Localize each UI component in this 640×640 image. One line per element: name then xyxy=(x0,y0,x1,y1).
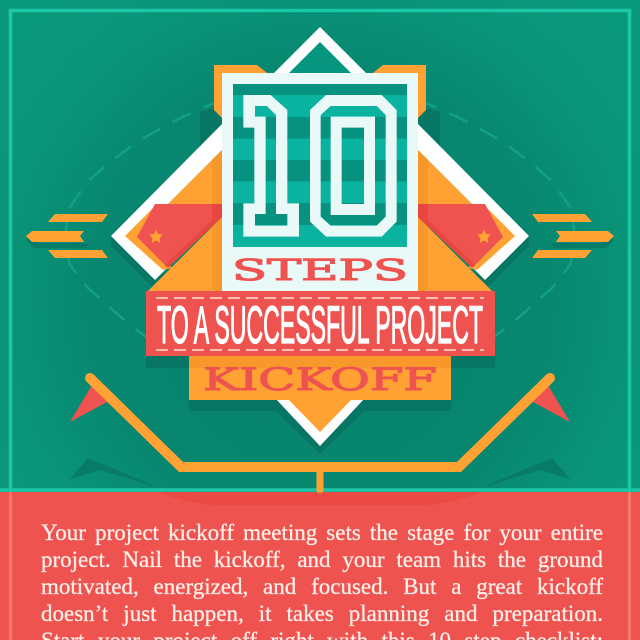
intro paragraph xyxy=(41,520,604,640)
green header background xyxy=(0,0,640,492)
KICKOFF banner: KICKOFF xyxy=(203,362,437,398)
striped number panel xyxy=(233,84,407,247)
KICKOFF banner xyxy=(189,356,451,400)
left speed arrows xyxy=(26,214,108,258)
right speed arrows xyxy=(532,214,614,258)
orange ear right xyxy=(373,65,426,118)
numeral 10 xyxy=(243,95,397,237)
teal header frame xyxy=(0,10,640,492)
intro paragraph: project. Nail the kickoff, and your team hits the ground xyxy=(41,547,603,572)
STEPS heading: STEPS xyxy=(232,253,408,287)
left ribbon with star xyxy=(125,204,222,270)
subtitle banner xyxy=(146,291,495,356)
right flag xyxy=(533,385,570,422)
orange ear left xyxy=(214,65,267,118)
intro paragraph: motivated, energized, and focused. But a great kickoff xyxy=(41,574,603,599)
diamond: right white band xyxy=(418,124,529,280)
right ribbon with star xyxy=(418,204,515,270)
orange panel right xyxy=(418,150,494,293)
orange chevron point below banner xyxy=(275,398,365,446)
diamond: left white band xyxy=(111,124,222,280)
diamond shadow xyxy=(111,108,529,454)
red intro panel xyxy=(0,492,640,640)
title card xyxy=(222,73,418,293)
intro paragraph: doesn’t just happen, it takes planning and preparation. xyxy=(41,601,603,626)
ground shadow under goal post xyxy=(70,458,570,488)
dashed outline behind the diamond xyxy=(66,100,574,340)
intro paragraph: Your project kickoff meeting sets the stage for your entire xyxy=(41,520,603,545)
left flag xyxy=(70,385,107,422)
goal post xyxy=(90,378,550,490)
diamond: top point xyxy=(245,27,395,102)
orange panel left xyxy=(146,150,222,293)
